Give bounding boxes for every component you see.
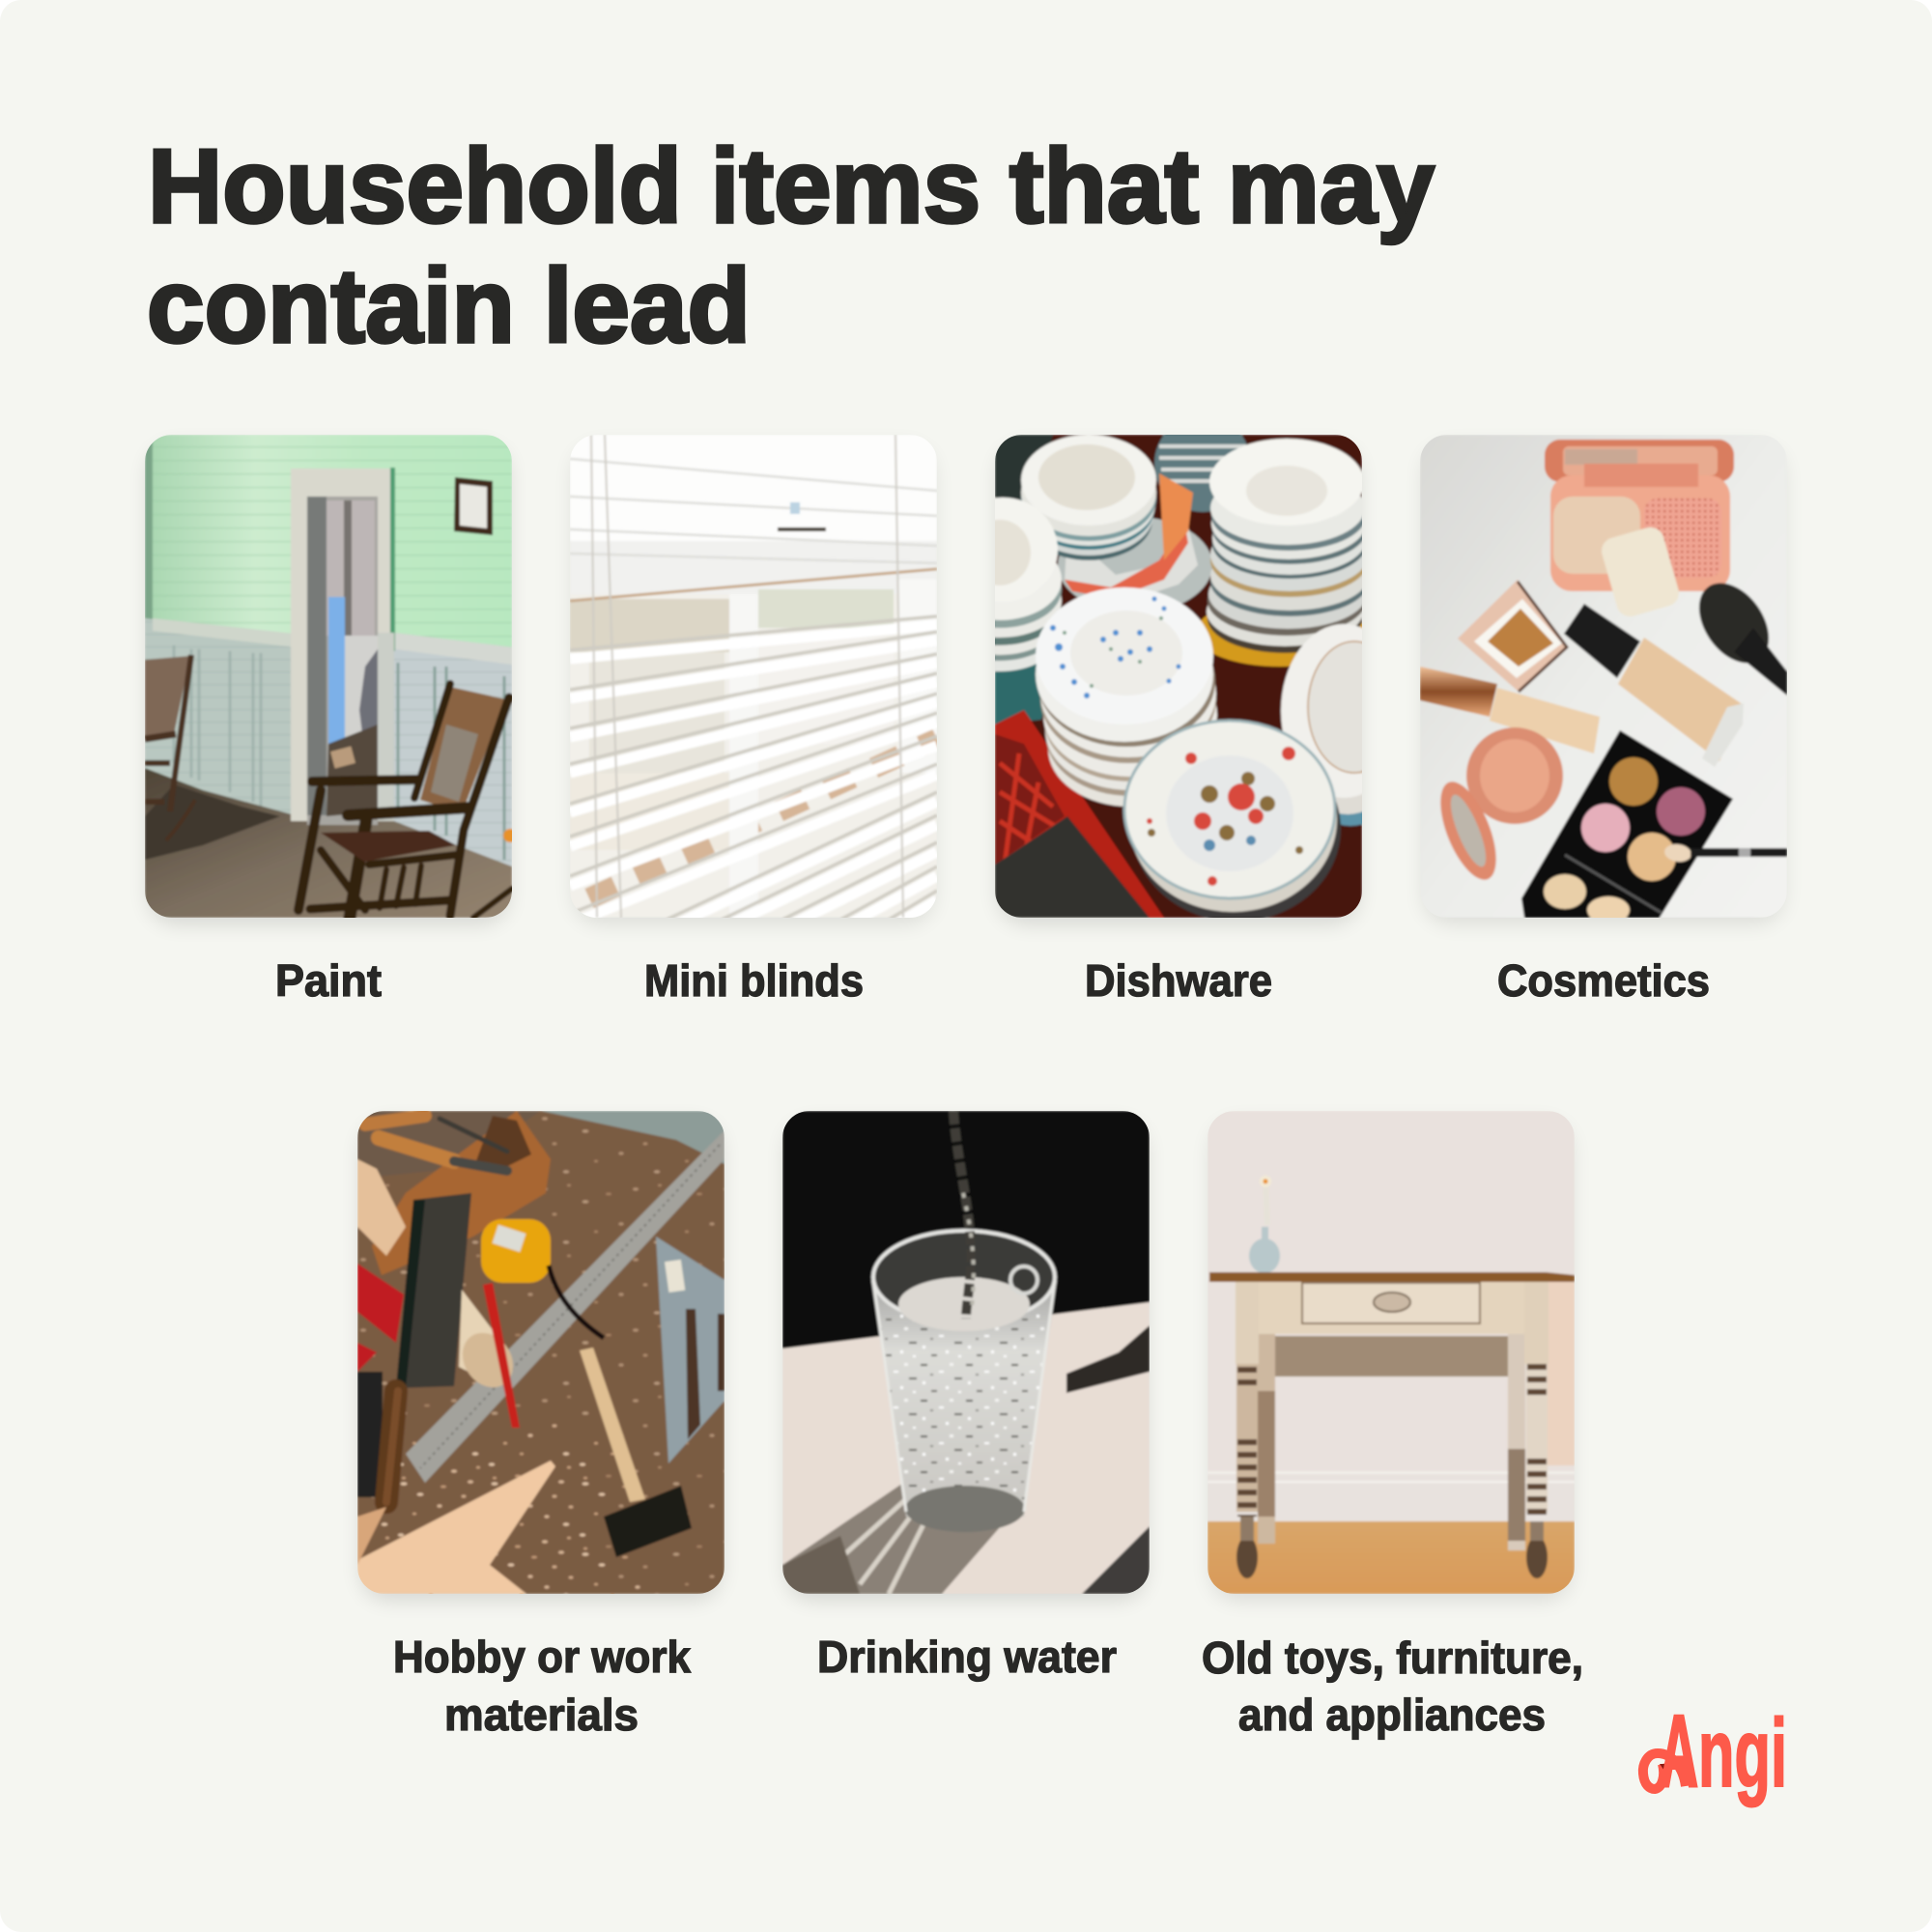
label: Hobby or work materials xyxy=(393,1632,691,1740)
box xyxy=(372,1111,551,1275)
label: Old toys, furniture, and appliances: and appliances xyxy=(1238,1690,1546,1740)
title xyxy=(147,128,1435,365)
label: Paint: Paint xyxy=(275,955,382,1006)
label: Dishware: Dishware xyxy=(1085,955,1272,1006)
tape xyxy=(481,1219,551,1283)
eyeshadow square xyxy=(1458,580,1567,692)
photo: green room with rocking chair xyxy=(145,435,517,923)
panel: Old toys, furniture, and appliances xyxy=(1202,1111,1583,1740)
front legs xyxy=(1236,1282,1259,1364)
table apron xyxy=(1236,1282,1547,1334)
photo: workbench with tools xyxy=(357,1111,724,1605)
applicator xyxy=(1663,842,1692,864)
label: Mini blinds: Mini blinds xyxy=(644,955,864,1006)
label: Drinking water: Drinking water xyxy=(817,1632,1117,1682)
chisels xyxy=(365,1116,507,1171)
logo: Angi xyxy=(1643,1694,1787,1808)
panel: Paint xyxy=(145,435,517,1006)
dowel xyxy=(457,1289,495,1372)
blush compact xyxy=(1466,727,1563,824)
foundation bottle xyxy=(1564,604,1640,678)
saw xyxy=(396,1193,471,1388)
logo: Angi: ngi xyxy=(1698,1699,1787,1807)
pencil xyxy=(483,1283,520,1428)
water stream xyxy=(953,1111,971,1319)
left stack xyxy=(995,665,1043,725)
panel: Hobby or work materials xyxy=(357,1111,724,1740)
table top xyxy=(1209,1272,1575,1282)
glass xyxy=(871,1281,1057,1517)
chisel handle xyxy=(357,1372,383,1497)
photo: stacks of plates xyxy=(992,435,1365,930)
panel: Drinking water xyxy=(782,1111,1150,1682)
crate xyxy=(995,710,1164,918)
palette xyxy=(1521,730,1733,918)
label: Cosmetics: Cosmetics xyxy=(1497,955,1710,1006)
photo: white window blinds xyxy=(570,435,937,929)
right stack xyxy=(1338,810,1362,829)
logo: Angi: A xyxy=(1660,1694,1698,1808)
top left stack xyxy=(1058,517,1212,613)
brush xyxy=(1698,582,1770,665)
top right stack xyxy=(1200,614,1362,668)
label: Hobby or work materials: materials xyxy=(444,1690,639,1740)
wood plank xyxy=(357,1461,555,1594)
label: Old toys, furniture, and appliances xyxy=(1202,1633,1583,1740)
photo: makeup products xyxy=(1420,435,1787,923)
legs back xyxy=(1258,1323,1275,1544)
red box xyxy=(357,1264,404,1343)
panel: Dishware xyxy=(992,435,1365,997)
photo: distressed table with vase xyxy=(1208,1111,1575,1600)
title: Household items that may xyxy=(148,128,1435,245)
left chair xyxy=(145,656,190,739)
concealer xyxy=(1420,667,1497,717)
label: Old toys, furniture, and appliances: Old toys, furniture, xyxy=(1202,1633,1583,1683)
hammer xyxy=(580,1348,645,1502)
compact xyxy=(1545,440,1734,482)
photo: water pouring into glass xyxy=(782,1111,1150,1600)
set square xyxy=(656,1236,724,1463)
title: contain lead xyxy=(147,247,751,365)
ruler xyxy=(406,1130,724,1483)
vase xyxy=(1265,1179,1267,1225)
center stack xyxy=(1046,749,1125,809)
label: Hobby or work materials: Hobby or work xyxy=(393,1632,691,1682)
panel: Cosmetics xyxy=(1420,435,1787,1006)
bottom plate xyxy=(1136,802,1343,918)
right chair xyxy=(420,687,506,813)
panel: Mini blinds xyxy=(570,435,937,1006)
